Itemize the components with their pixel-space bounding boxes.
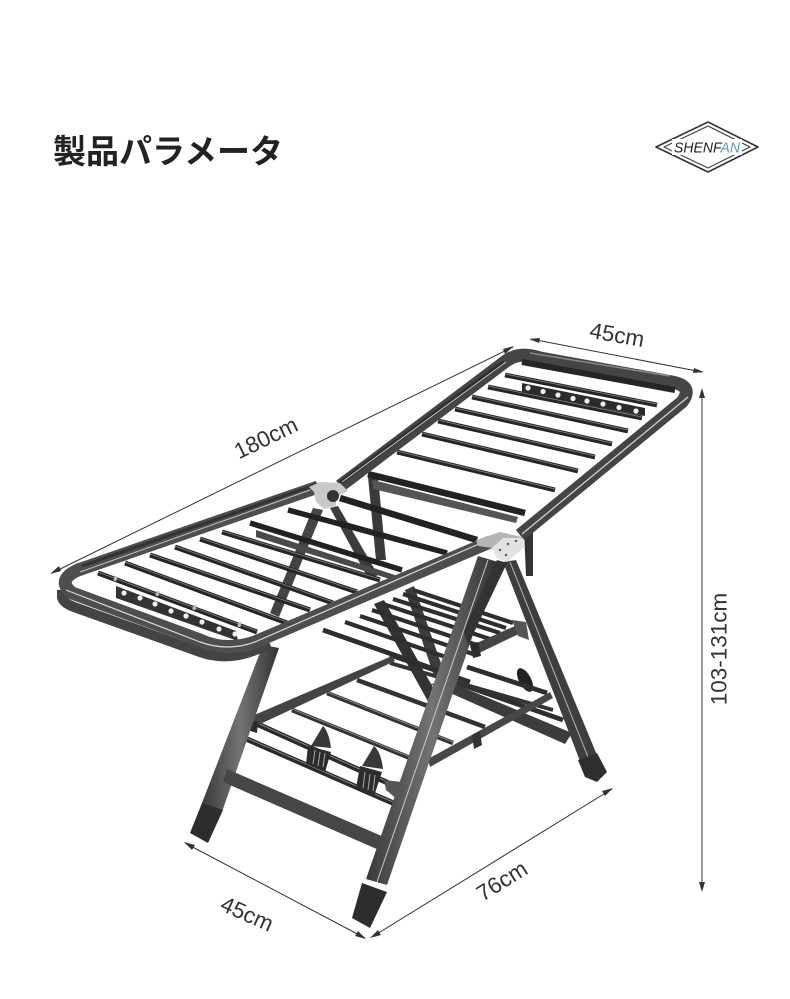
left wing frame [62, 484, 490, 656]
back posts and X legs [270, 477, 533, 705]
right wing rails [340, 374, 657, 553]
left front leg [190, 645, 279, 843]
hole plate: left wing [116, 586, 238, 641]
hinge: left [309, 482, 348, 509]
hole plate: right wing [522, 383, 645, 416]
dimension: 103-131cm: 103-131cm [706, 593, 732, 705]
hinge: right [476, 532, 524, 562]
icon: clip left [306, 726, 331, 772]
big front right leg [352, 556, 507, 928]
dimension: 45cm bottom: 45cm [217, 891, 277, 937]
long lower rails and back brace [323, 630, 572, 744]
foot: left [190, 803, 223, 843]
dimension: 180cm: 180cm [230, 412, 302, 464]
logo: SHENFAN [656, 122, 758, 172]
dimension: 45cm bottom [184, 842, 366, 939]
upper shelf [345, 590, 529, 662]
foot: back right [578, 753, 607, 782]
dimension: 103-131cm [699, 388, 732, 892]
left wing rails [98, 510, 447, 641]
dimension: 180cm [50, 346, 514, 574]
logo: SHENFAN: SHENFAN [674, 140, 740, 156]
drying rack [62, 353, 688, 928]
wheel behind lower shelf [514, 666, 536, 694]
foot: front right [352, 883, 387, 928]
dimension: 76cm [370, 788, 613, 938]
dimension: 45cm top: 45cm [588, 318, 646, 352]
dimension: 45cm top [529, 318, 704, 373]
lower shelf [242, 656, 553, 803]
dimension: 76cm: 76cm [472, 856, 532, 906]
back right leg [503, 560, 607, 782]
title: 製品パラメータ [53, 133, 283, 170]
icon: clip right [356, 746, 383, 796]
front crossbar [223, 769, 384, 850]
right wing frame [340, 353, 688, 535]
